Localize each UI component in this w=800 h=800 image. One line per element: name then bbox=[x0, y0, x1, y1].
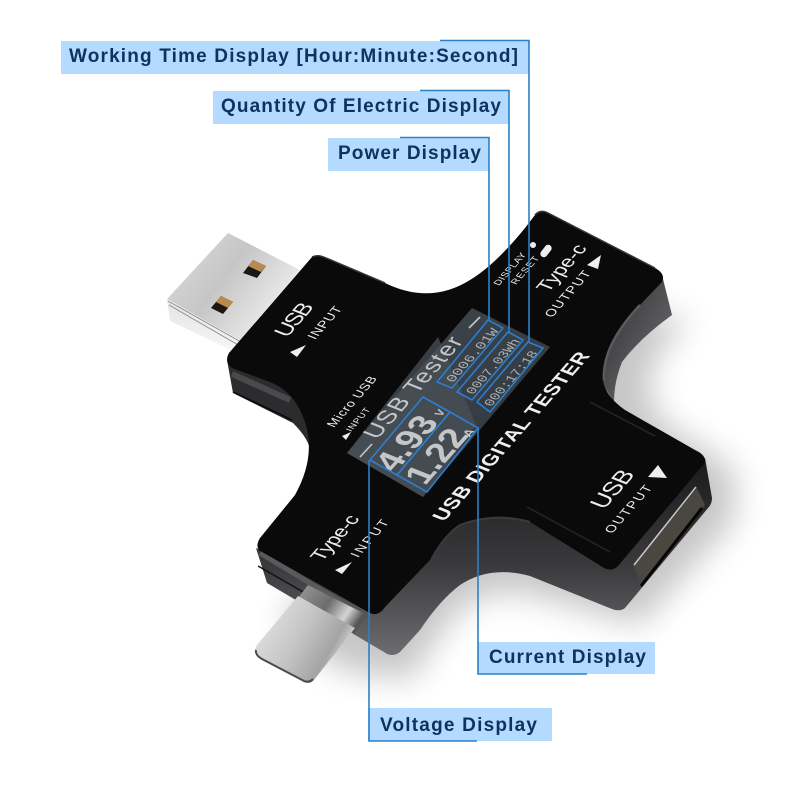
screen reading: energy: 0007.03Wh bbox=[463, 337, 524, 396]
body top face bbox=[227, 211, 705, 614]
USB-C plug bbox=[255, 585, 367, 683]
device label: Type-c output: Type-c bbox=[532, 242, 592, 295]
USB-A plug bbox=[167, 233, 300, 351]
soft drop shadow bbox=[280, 300, 735, 680]
device label: USB input: INPUT bbox=[304, 304, 346, 341]
display screen bbox=[347, 308, 550, 497]
collar bbox=[298, 585, 367, 634]
plug hole upper bbox=[243, 260, 266, 278]
callout: current display: Current Display bbox=[489, 647, 646, 668]
device label: USB input: USB bbox=[268, 299, 319, 340]
glossy edges bbox=[432, 518, 530, 558]
device label: USB output: USB bbox=[584, 466, 641, 512]
plug top plate bbox=[167, 233, 300, 340]
USB output micro port bbox=[633, 487, 705, 586]
callout: quantity of electric display bbox=[213, 90, 509, 332]
plug front edge bbox=[167, 300, 245, 351]
plug hole lower bbox=[211, 296, 233, 314]
device label: Type-c input: INPUT bbox=[347, 518, 393, 559]
screen glare bbox=[347, 337, 476, 497]
device label: display and reset buttons: RESET bbox=[509, 255, 543, 286]
body side walls bbox=[227, 275, 712, 655]
screen reading: time: 000:17:18 bbox=[481, 349, 542, 408]
device label: display and reset buttons bbox=[492, 242, 553, 287]
screen reading: power: 0006.01W bbox=[443, 326, 503, 384]
callout: power display: Power Display bbox=[338, 143, 481, 164]
screen reading: current: 1.22 bbox=[396, 424, 477, 489]
callout: quantity of electric display: Quantity Of Electric Display bbox=[221, 96, 501, 117]
device label: USB input bbox=[268, 299, 346, 357]
screen reading: voltage: 4.93 bbox=[366, 411, 447, 476]
callout: current display bbox=[478, 428, 655, 674]
device label: Type-c input: Type-c bbox=[306, 512, 365, 564]
callout: power display bbox=[328, 138, 489, 320]
callout: voltage display: Voltage Display bbox=[380, 715, 537, 736]
device label: USB output bbox=[584, 465, 667, 535]
device label: USB digital tester: USB DIGITAL TESTER bbox=[428, 349, 596, 524]
screen heading: USB Tester: USB Tester bbox=[357, 333, 470, 442]
callout: working time display: Working Time Display [Hour:Minute:Second] bbox=[69, 46, 518, 67]
device label: Micro USB input: INPUT bbox=[344, 406, 373, 433]
device label: Type-c output bbox=[532, 242, 601, 319]
device label: USB output: OUTPUT bbox=[601, 483, 656, 535]
device label: Type-c input bbox=[306, 512, 393, 574]
plug body bbox=[255, 596, 355, 683]
readout highlight boxes bbox=[370, 320, 543, 492]
device label: Type-c output: OUTPUT bbox=[541, 269, 594, 319]
callout: voltage display bbox=[368, 460, 552, 741]
callout: working time display bbox=[61, 40, 529, 342]
screen reading: voltage: V bbox=[433, 408, 449, 418]
screen reading: current: A bbox=[459, 426, 479, 439]
device label: Micro USB input: Micro USB bbox=[324, 374, 380, 429]
device label: display and reset buttons: DISPLAY bbox=[492, 251, 530, 287]
